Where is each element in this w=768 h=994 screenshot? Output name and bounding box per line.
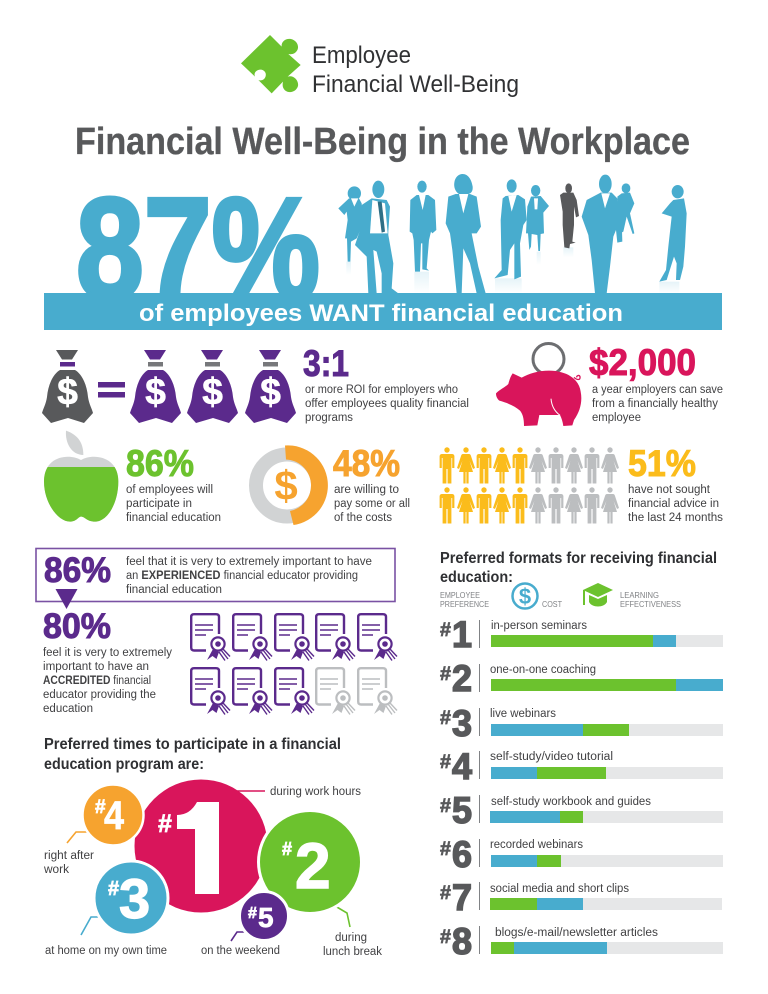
description: are willing to <box>334 484 399 496</box>
chart: donut with dollar <box>256 445 328 525</box>
icon: piggy bank with coin <box>496 344 581 426</box>
panel: accredited educator <box>43 607 397 715</box>
bubble #4 right after work <box>82 784 144 846</box>
banner: of employees want financial education: of employees WANT financial education <box>139 300 623 327</box>
logo text: Financial Well-Being <box>312 71 519 98</box>
row #3 live webinars: live webinars <box>490 708 556 720</box>
description <box>334 484 410 524</box>
icon: gray money bag: $ <box>57 371 78 412</box>
panel: experienced educator callout <box>36 548 395 602</box>
description <box>628 484 723 524</box>
bubble labels: at home on my own time <box>45 945 167 957</box>
icon grid: certificates <box>191 614 397 714</box>
description: financial education <box>126 584 222 596</box>
legend: employee preference: EMPLOYEE <box>440 590 480 600</box>
bubble #5 on the weekend: # <box>248 905 257 922</box>
row #7 social media: # <box>440 883 451 904</box>
row #1 in-person seminars: # <box>440 620 451 641</box>
bubble #3 at home: 3 <box>119 867 150 930</box>
row #6 recorded webinars: recorded webinars <box>490 839 583 851</box>
row #5 self-study workbook: self-study workbook and guides <box>491 796 651 808</box>
icon: apple filled 86% <box>44 431 118 522</box>
description <box>126 484 221 524</box>
icon: dollar coin <box>512 584 538 609</box>
row #8 blogs: blogs/e-mail/newsletter articles <box>495 927 658 939</box>
icon: people row 2 <box>440 487 619 524</box>
row #4 self-study video tutorial <box>440 746 723 787</box>
row #4 self-study video tutorial: self-study/video tutorial <box>490 751 613 763</box>
bubble #1 during work hours: # <box>158 810 172 838</box>
bubble #1 during work hours <box>134 780 268 918</box>
heading: preferred times: Preferred times to participate in a financial <box>44 736 341 753</box>
panel: $2,000 savings <box>496 342 723 426</box>
row #6 recorded webinars: 6 <box>452 834 472 875</box>
description: ACCREDITED financial <box>43 675 151 687</box>
row #3 live webinars: # <box>440 708 451 729</box>
legend: learning effectiveness: LEARNING <box>620 590 659 600</box>
description: pay some or all <box>334 498 410 510</box>
silhouettes: left group <box>338 174 527 294</box>
silhouettes: right group <box>526 175 687 293</box>
legend: employee preference <box>440 590 489 609</box>
row #5 self-study workbook: 5 <box>452 790 472 831</box>
arrow: down triangle <box>56 589 78 609</box>
row #5 self-study workbook <box>440 790 723 831</box>
legend: employee preference: PREFERENCE <box>440 599 489 609</box>
stat: $2,000: $2,000 <box>589 342 696 383</box>
icon: green puzzle piece <box>241 35 301 93</box>
icon: dollar coin: $ <box>519 584 531 609</box>
icon: purple money bags: $ <box>260 371 281 412</box>
stat: 86%: 86% <box>126 443 194 484</box>
icon: purple money bags <box>130 350 296 423</box>
bubble #1 during work hours: 1 <box>181 784 217 918</box>
row #3 live webinars <box>440 703 723 744</box>
heading: preferred formats: Preferred formats for receiving financial <box>440 550 717 567</box>
row #8 blogs <box>440 921 723 962</box>
heading: preferred times <box>44 736 341 773</box>
row #7 social media <box>440 877 722 918</box>
logo: Employee Financial Well-Being <box>241 35 519 98</box>
description: of the costs <box>334 512 392 524</box>
icon: purple money bags: $ <box>145 371 166 412</box>
big stat: 87%: 87% <box>76 168 320 329</box>
title: Financial Well-Being in the Workplace <box>75 121 690 163</box>
logo text <box>312 42 519 98</box>
row #3 live webinars: 3 <box>452 703 472 744</box>
row #2 one-on-one coaching <box>440 658 723 699</box>
row #1 in-person seminars <box>440 614 723 655</box>
panel: 86% will participate <box>44 431 221 524</box>
stat: 51%: 51% <box>628 443 696 484</box>
row #4 self-study video tutorial: # <box>440 752 451 773</box>
description: feel that it is very to extremely important to have <box>126 556 372 568</box>
bubble #3 at home <box>94 861 168 935</box>
heading: preferred formats: education: <box>440 569 513 586</box>
legend <box>440 583 681 609</box>
description: offer employees quality financial <box>305 398 469 410</box>
banner: of employees want financial education <box>44 293 722 330</box>
icon: purple money bags: $ <box>202 371 223 412</box>
description: important to have an <box>43 661 149 673</box>
chart: ranked formats <box>440 614 723 962</box>
description: have not sought <box>628 484 711 496</box>
bubble labels: work <box>43 864 69 876</box>
description: a year employers can save <box>592 384 723 396</box>
bubble labels: during work hours <box>270 786 361 798</box>
bubble #3 at home: # <box>108 878 119 900</box>
icon: equals sign <box>98 382 125 398</box>
row #7 social media: social media and short clips <box>490 883 629 895</box>
logo text: Employee <box>312 42 411 69</box>
description: educator providing the <box>43 689 156 701</box>
legend: learning effectiveness <box>620 590 681 609</box>
description: of employees will <box>126 484 213 496</box>
panel: 3:1 ROI <box>42 343 469 424</box>
bubble labels: on the weekend <box>201 945 280 957</box>
legend: learning effectiveness: EFFECTIVENESS <box>620 599 681 609</box>
row #5 self-study workbook: # <box>440 796 451 817</box>
leader lines <box>67 791 350 941</box>
description <box>43 647 172 715</box>
row #2 one-on-one coaching: # <box>440 664 451 685</box>
description: feel it is very to extremely <box>43 647 172 659</box>
bubble #4 right after work: # <box>95 797 106 818</box>
icon: gray money bag <box>42 350 93 423</box>
bubble #2 during lunch break <box>258 810 362 914</box>
legend: cost: COST <box>542 599 562 609</box>
row #6 recorded webinars: # <box>440 839 451 860</box>
row #7 social media: 7 <box>452 877 472 918</box>
icon: graduation cap <box>583 583 613 606</box>
description: programs <box>305 412 353 424</box>
description: or more ROI for employers who <box>305 384 458 396</box>
description: financial advice in <box>628 498 719 510</box>
description: participate in <box>126 498 192 510</box>
people silhouettes <box>338 174 687 294</box>
bubble labels: lunch break <box>323 946 382 958</box>
row #2 one-on-one coaching: one-on-one coaching <box>490 664 596 676</box>
row #1 in-person seminars: 1 <box>452 614 472 655</box>
description <box>126 556 372 596</box>
row #2 one-on-one coaching: 2 <box>452 658 472 699</box>
row #8 blogs: 8 <box>452 921 472 962</box>
bubble #4 right after work: 4 <box>104 794 125 838</box>
description <box>592 384 723 424</box>
description: financial education <box>126 512 221 524</box>
panel: 51% no advice <box>440 443 723 524</box>
row #4 self-study video tutorial: 4 <box>452 746 472 787</box>
stat: 80%: 80% <box>43 607 111 646</box>
heading: preferred formats <box>440 550 717 586</box>
stat: 48%: 48% <box>333 443 400 484</box>
panel: 48% willing to pay <box>256 443 410 525</box>
description: employee <box>592 412 641 424</box>
description <box>305 384 469 424</box>
bubble labels <box>43 786 382 958</box>
bubble #2 during lunch break: 2 <box>295 830 331 902</box>
description: from a financially healthy <box>592 398 718 410</box>
row #1 in-person seminars: in-person seminars <box>491 620 587 632</box>
bubble #2 during lunch break: # <box>282 839 292 859</box>
icon: people row 1 <box>440 447 619 484</box>
bubble #5 on the weekend <box>240 892 288 940</box>
chart: donut with dollar: $ <box>274 462 298 509</box>
bubble labels: right after <box>44 850 94 862</box>
description: an EXPERIENCED financial educator providing <box>126 570 358 582</box>
stat: 3:1: 3:1 <box>303 343 349 384</box>
description: the last 24 months <box>628 512 723 524</box>
bubble #5 on the weekend: 5 <box>258 902 274 933</box>
row #6 recorded webinars <box>440 834 723 875</box>
stat: 86%: 86% <box>44 551 111 590</box>
description: education <box>43 703 93 715</box>
heading: preferred times: education program are: <box>44 756 204 773</box>
row #8 blogs: # <box>440 927 451 948</box>
bubble labels: during <box>335 932 367 944</box>
chart: preferred times bubbles <box>43 780 382 958</box>
